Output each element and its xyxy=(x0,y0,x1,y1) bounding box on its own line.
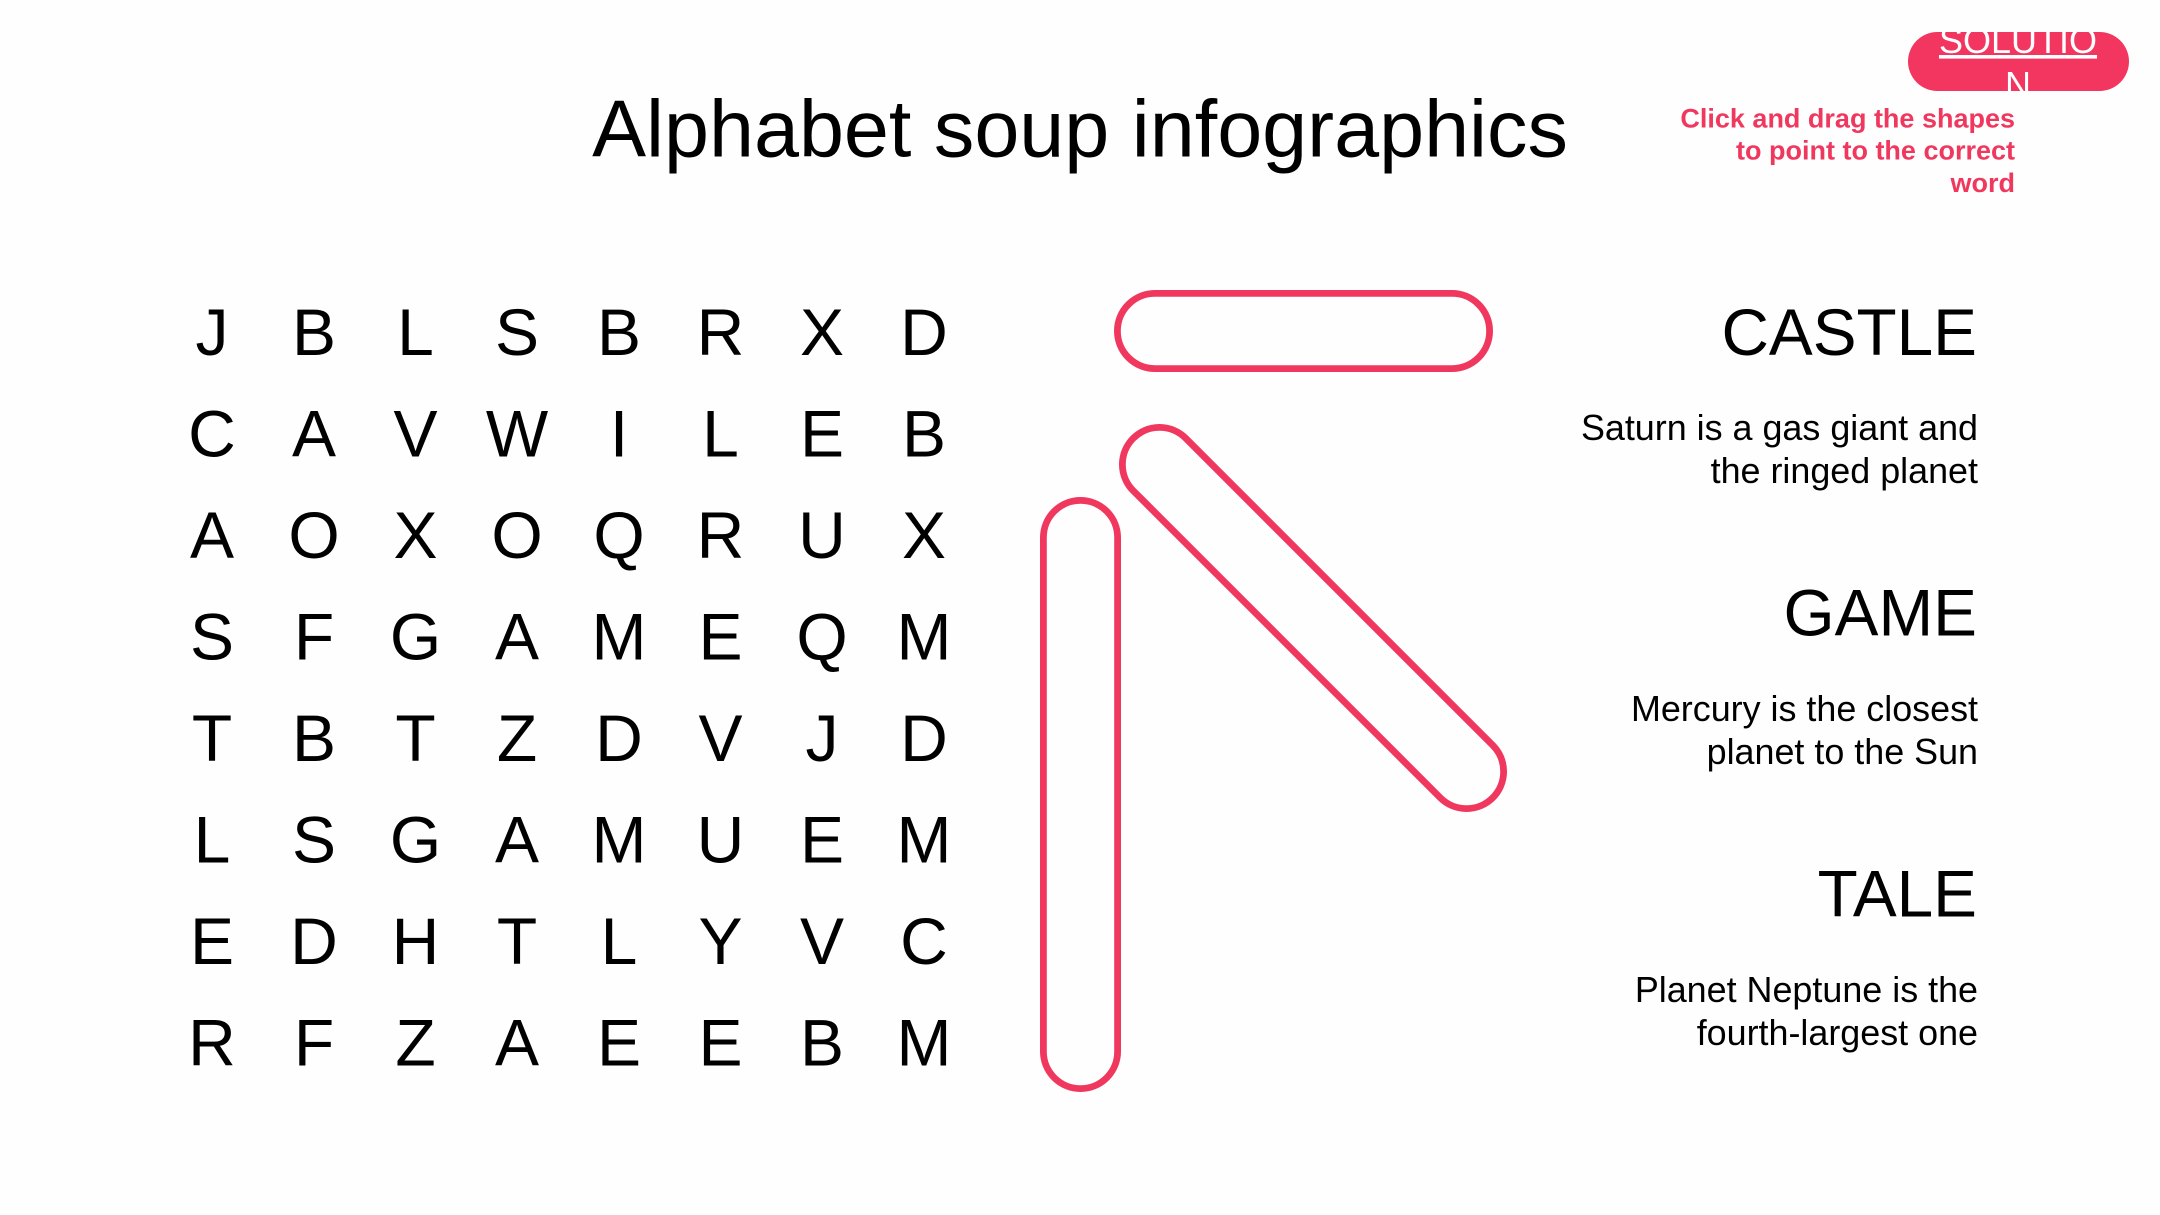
letter grid: A xyxy=(190,498,234,572)
letter grid: Q xyxy=(593,498,645,572)
letter grid: R xyxy=(697,498,744,572)
horizontal pill shape xyxy=(1117,293,1490,369)
letter grid: X xyxy=(800,295,844,369)
word block: game xyxy=(1631,576,1978,772)
word block: game: GAME xyxy=(1784,576,1977,650)
letter grid: L xyxy=(702,396,739,470)
letter grid: R xyxy=(697,295,744,369)
letter grid: G xyxy=(390,802,441,876)
letter grid: V xyxy=(698,701,743,775)
title: Alphabet soup infographics xyxy=(592,84,1568,174)
letter grid: W xyxy=(486,396,549,470)
letter grid: E xyxy=(190,904,234,978)
letter grid: C xyxy=(900,904,948,978)
letter grid: M xyxy=(592,600,646,674)
diagonal pill shape xyxy=(1107,412,1519,824)
letter grid: L xyxy=(194,802,230,876)
letter grid: A xyxy=(495,802,539,876)
letter grid: Z xyxy=(497,701,537,775)
instruction text xyxy=(1680,104,2015,198)
letter grid: B xyxy=(597,295,641,369)
letter grid: A xyxy=(495,600,539,674)
letter grid: L xyxy=(397,295,434,369)
letter grid: O xyxy=(491,498,543,572)
letter grid: A xyxy=(292,396,336,470)
letter grid: B xyxy=(902,396,946,470)
solution button: SOLUTIO xyxy=(1939,20,2097,61)
word block: castle: the ringed planet xyxy=(1711,451,1978,491)
letter grid: E xyxy=(597,1006,641,1080)
letter grid: F xyxy=(294,1006,334,1080)
letter grid: E xyxy=(698,600,743,674)
letter grid: O xyxy=(288,498,340,572)
word block: castle xyxy=(1581,296,1978,491)
letter grid: X xyxy=(902,498,946,572)
letter grid: Z xyxy=(395,1006,436,1080)
letter grid: E xyxy=(698,1006,743,1080)
letter grid: U xyxy=(798,498,846,572)
letter grid: L xyxy=(601,904,637,978)
letter grid: S xyxy=(495,295,539,369)
letter grid: Y xyxy=(698,904,743,978)
letter grid: J xyxy=(196,295,228,369)
letter grid: E xyxy=(800,396,844,470)
letter grid: I xyxy=(610,396,628,470)
letter grid: G xyxy=(390,600,441,674)
letter grid: Q xyxy=(796,600,848,674)
letter grid: B xyxy=(292,295,336,369)
letter grid: M xyxy=(897,1006,951,1080)
letter grid: M xyxy=(592,802,646,876)
word block: tale xyxy=(1635,858,1978,1053)
letter grid: B xyxy=(292,701,336,775)
word block: castle: Saturn is a gas giant and xyxy=(1581,408,1978,448)
word block: game: planet to the Sun xyxy=(1707,732,1978,772)
letter grid: F xyxy=(294,600,334,674)
letter grid: D xyxy=(900,701,948,775)
letter grid: J xyxy=(806,701,838,775)
instruction text: word xyxy=(1950,168,2015,198)
letter grid: D xyxy=(290,904,338,978)
vertical pill shape xyxy=(1043,500,1118,1089)
letter grid: A xyxy=(495,1006,539,1080)
solution button: N xyxy=(2005,64,2031,105)
letter grid: R xyxy=(188,1006,236,1080)
word block: tale: TALE xyxy=(1818,858,1977,930)
letter grid: T xyxy=(192,701,232,775)
letter grid: M xyxy=(897,802,951,876)
letter grid: X xyxy=(393,498,438,572)
word block: game: Mercury is the closest xyxy=(1631,689,1978,729)
letter grid: H xyxy=(392,904,439,978)
solution button xyxy=(1908,32,2129,91)
letter grid xyxy=(188,295,951,1080)
word block: tale: Planet Neptune is the xyxy=(1635,970,1978,1010)
letter grid: B xyxy=(800,1006,844,1080)
letter grid: D xyxy=(595,701,643,775)
letter grid: T xyxy=(497,904,537,978)
letter grid: C xyxy=(188,396,236,470)
word block: castle: CASTLE xyxy=(1721,296,1977,369)
instruction text: to point to the correct xyxy=(1736,136,2015,166)
letter grid: M xyxy=(897,600,951,674)
letter grid: V xyxy=(393,396,438,470)
letter grid: U xyxy=(697,802,744,876)
letter grid: D xyxy=(900,295,948,369)
letter grid: S xyxy=(190,600,234,674)
instruction text: Click and drag the shapes xyxy=(1680,104,2015,134)
letter grid: V xyxy=(800,904,844,978)
letter grid: T xyxy=(395,701,436,775)
letter grid: S xyxy=(292,802,336,876)
letter grid: E xyxy=(800,802,844,876)
word block: tale: fourth-largest one xyxy=(1697,1013,1978,1053)
